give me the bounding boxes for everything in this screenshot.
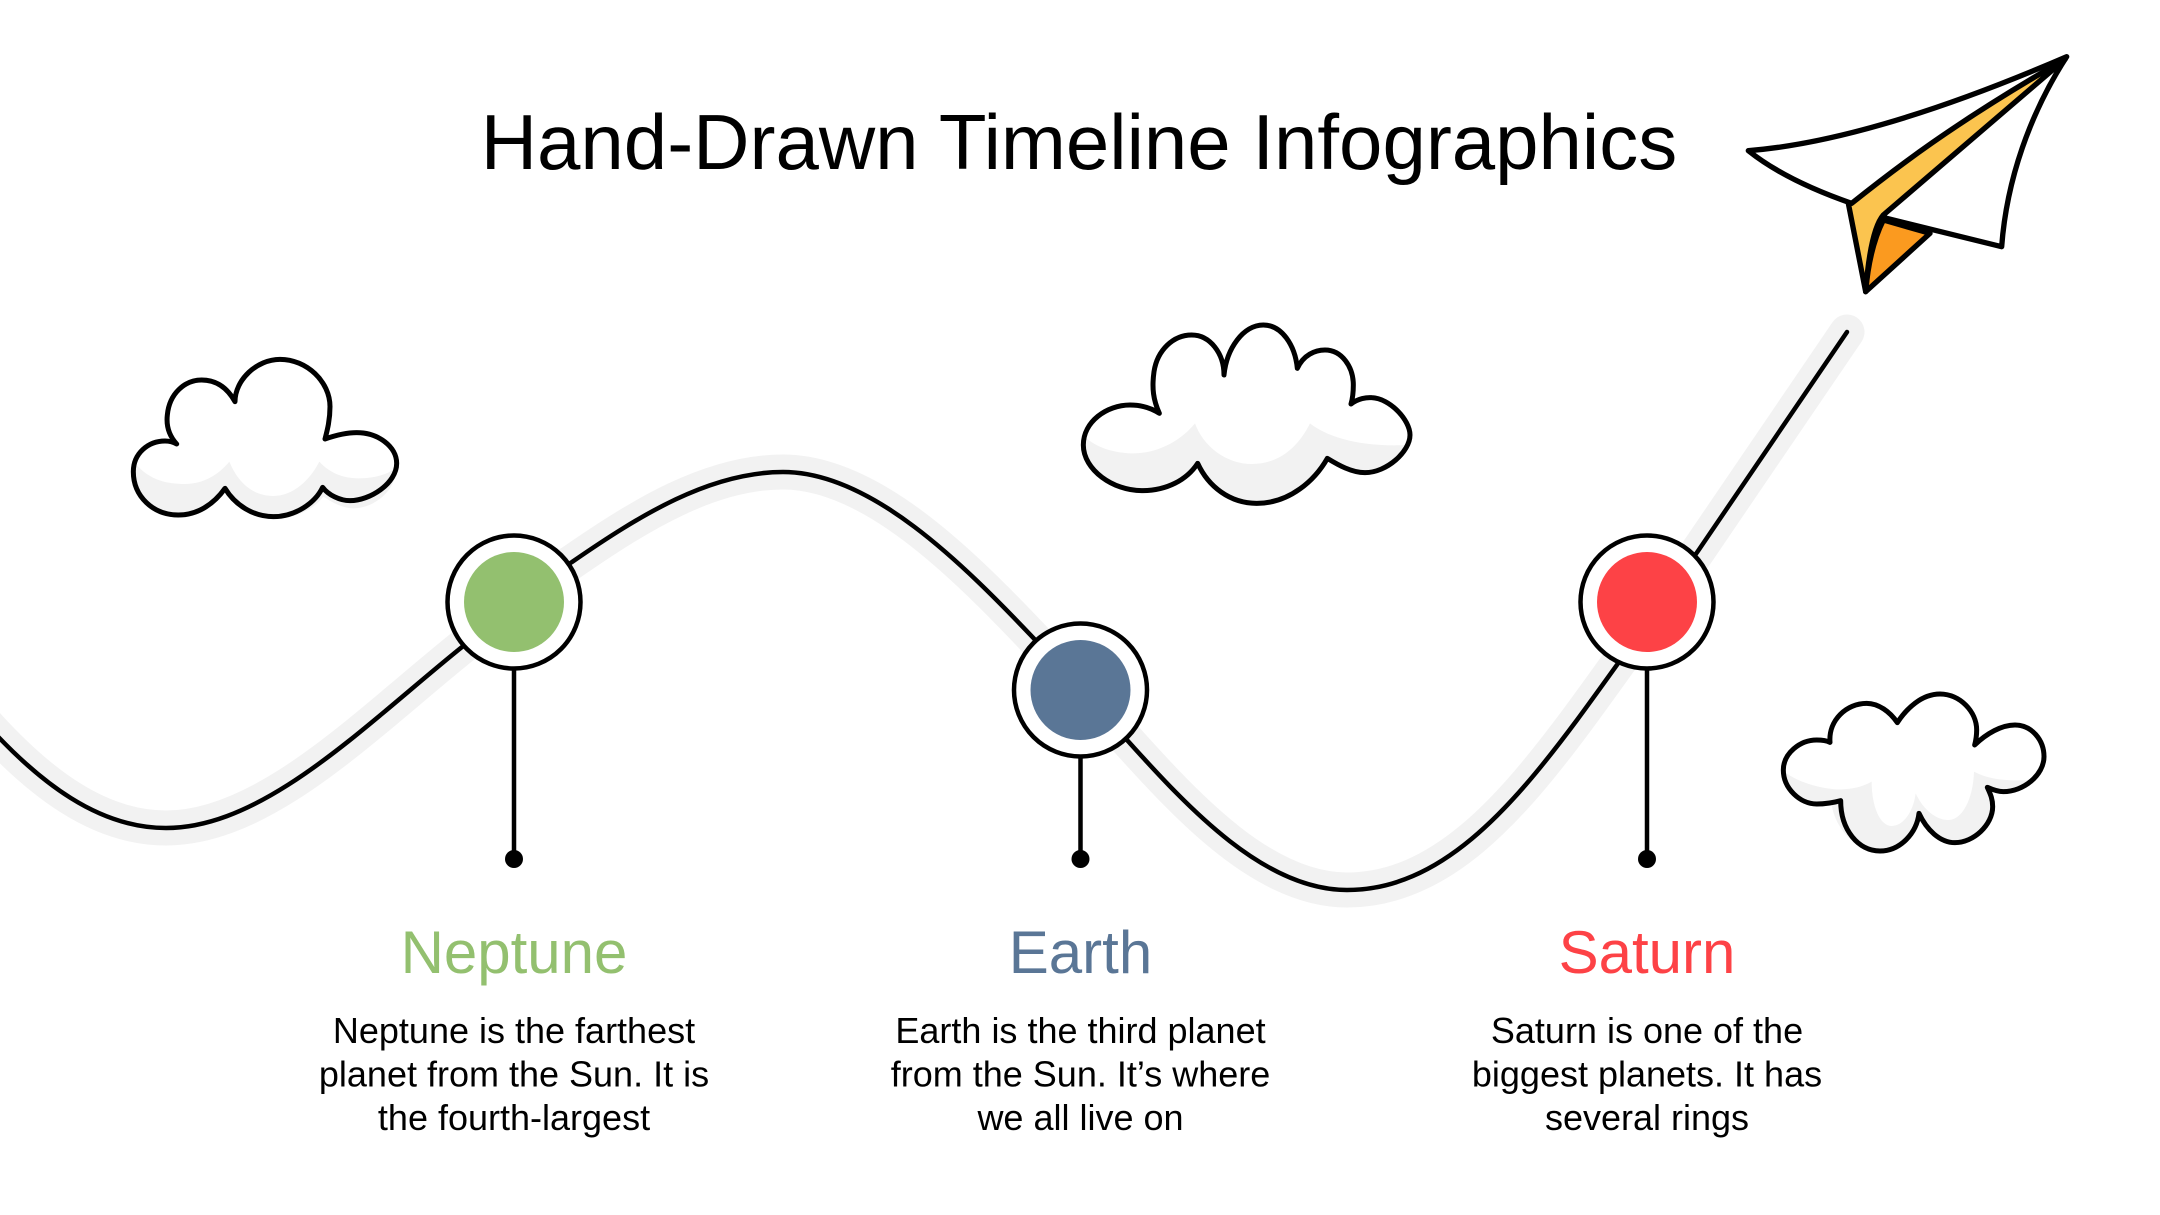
text: Saturn description: biggest planets. It has: [1472, 1054, 1822, 1094]
timeline curve: [0, 332, 1847, 890]
text: Earth description: Earth is the third planet: [895, 1010, 1266, 1051]
text: Earth description: we all live on: [976, 1097, 1184, 1138]
panel: Saturn: [1472, 536, 1822, 1138]
text: Neptune description: Neptune is the farthest: [333, 1010, 695, 1051]
heading: Saturn: Saturn: [1559, 919, 1735, 986]
icon: cloud left: [133, 359, 397, 519]
text: Saturn description: Saturn is one of the: [1491, 1010, 1803, 1051]
icon: cloud centre: [1083, 325, 1410, 506]
marker: Earth: [1014, 624, 1147, 868]
text: Saturn description: several rings: [1545, 1097, 1749, 1138]
marker: Saturn: [1580, 536, 1714, 868]
icon: cloud right: [1783, 694, 2044, 853]
text: Earth description: from the Sun. It’s where: [891, 1054, 1270, 1094]
icon: paper plane: [1748, 57, 2067, 292]
panel: Neptune: [319, 536, 709, 1138]
title: Hand-Drawn Timeline Infographics: [481, 98, 1677, 186]
text: Neptune description: planet from the Sun. It is: [319, 1054, 709, 1094]
text: Neptune description: the fourth-largest: [378, 1097, 650, 1138]
heading: Earth: Earth: [1009, 919, 1152, 986]
marker: Neptune: [448, 536, 580, 868]
heading: Neptune: Neptune: [401, 919, 627, 986]
panel: Earth: [891, 624, 1270, 1138]
